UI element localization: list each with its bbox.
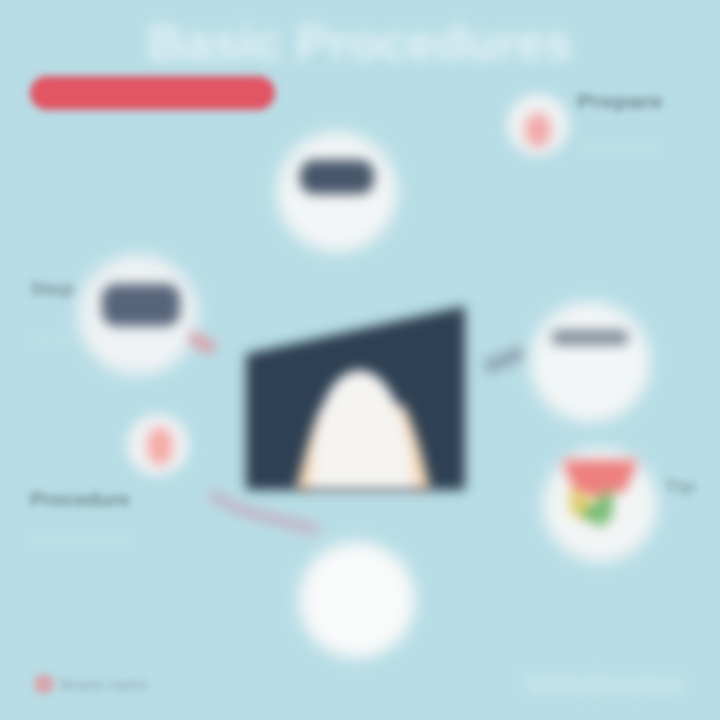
label: coloured circle: Tip bbox=[664, 477, 696, 496]
subtitle banner bbox=[30, 76, 275, 110]
panel: left circle bbox=[78, 255, 198, 375]
label: lower left: Description bbox=[28, 531, 132, 548]
footer logo: Brand name bbox=[60, 677, 148, 694]
icon: left circle dark bar bbox=[102, 284, 180, 326]
panel: bottom circle bbox=[299, 542, 415, 658]
label: left: Step bbox=[30, 279, 74, 299]
label: lower left bbox=[28, 490, 132, 548]
icon: right circle bar bbox=[552, 330, 628, 345]
label: top right: Prepare bbox=[577, 92, 663, 113]
footer text: Website bbox=[525, 668, 685, 701]
arrow: left circle to centre bbox=[190, 336, 214, 350]
central dark panel bbox=[246, 306, 465, 490]
icon: top circle dark bar bbox=[300, 160, 374, 194]
label: left: Note bbox=[30, 333, 74, 348]
panel: right circle bbox=[530, 302, 650, 422]
arrow: centre to right circle bbox=[485, 352, 524, 368]
label: lower left: Procedure bbox=[30, 490, 130, 511]
central arch figure bbox=[296, 370, 430, 490]
footer logo bbox=[34, 674, 148, 694]
label: top right: Description bbox=[578, 138, 662, 154]
icon: left small circle bbox=[127, 414, 189, 476]
title: Basic Procedures bbox=[148, 15, 572, 71]
arrow: centre to bottom circle bbox=[210, 494, 318, 530]
label: left bbox=[30, 279, 74, 348]
icon: top right small circle bbox=[507, 94, 569, 156]
icon: colourful fan bbox=[562, 460, 638, 530]
panel: top circle bbox=[277, 132, 397, 252]
label: top right bbox=[577, 92, 663, 154]
panel: coloured circle bbox=[543, 448, 657, 562]
